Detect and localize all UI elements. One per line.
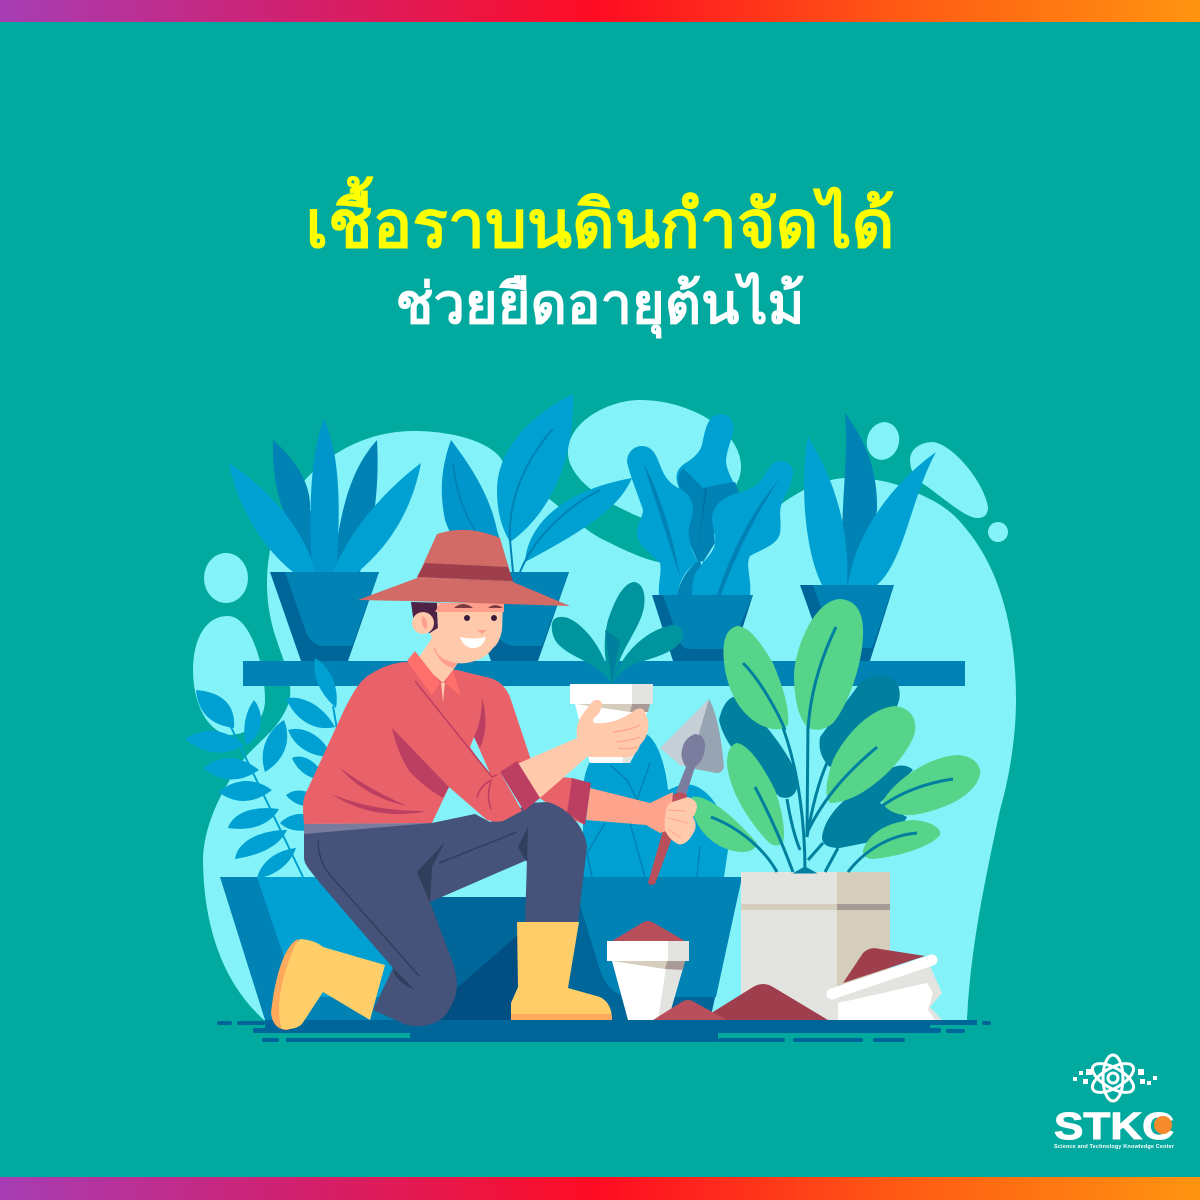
right boot <box>511 922 612 1020</box>
title: เชื้อราบนดินกำจัดได้ <box>305 175 895 261</box>
hat <box>358 530 570 606</box>
subtitle: ช่วยยืดอายุต้นไม้ <box>395 271 805 339</box>
logo atom icon <box>1088 1055 1138 1101</box>
neck <box>417 638 458 683</box>
waistband <box>304 823 432 834</box>
logo tagline: Science and Technology Knowledge Center <box>1054 1144 1175 1150</box>
plant 2 on shelf <box>442 394 632 661</box>
left fern <box>185 658 338 878</box>
light gap between arm and body <box>470 737 490 773</box>
finger creases <box>613 725 640 749</box>
near arm <box>517 700 648 798</box>
trowel <box>648 699 724 885</box>
small soil pot <box>607 921 689 1020</box>
logo orange dot <box>1154 1116 1172 1134</box>
head <box>411 602 504 663</box>
logo pixels <box>1073 1069 1157 1085</box>
shirt <box>303 662 532 824</box>
pants <box>304 802 587 1026</box>
right leafy plant <box>690 599 980 872</box>
soil mounds <box>653 984 828 1020</box>
bottom gradient bar <box>0 1177 1200 1200</box>
large white pot <box>741 872 890 1020</box>
shelf <box>243 661 965 686</box>
left boot <box>271 939 385 1030</box>
plant 1 on shelf <box>229 419 421 661</box>
big planter <box>220 733 742 1020</box>
STKC logo <box>1054 1055 1175 1150</box>
held white pot <box>570 684 653 763</box>
ground bar with speed lines <box>217 1020 991 1042</box>
logo wordmark: STKC <box>1054 1106 1174 1148</box>
background blobs <box>193 400 1016 1020</box>
gardener <box>271 530 697 1030</box>
tipped soil pot <box>832 948 942 1020</box>
top gradient bar <box>0 0 1200 22</box>
small plant held <box>552 582 683 684</box>
plant 4 on shelf <box>800 413 936 661</box>
far arm with hand on trowel <box>538 777 697 844</box>
pants details <box>318 827 528 990</box>
shirt cuff <box>500 761 540 811</box>
shirt folds <box>331 681 497 814</box>
collar <box>407 651 461 702</box>
plant 3 on shelf <box>627 414 793 661</box>
